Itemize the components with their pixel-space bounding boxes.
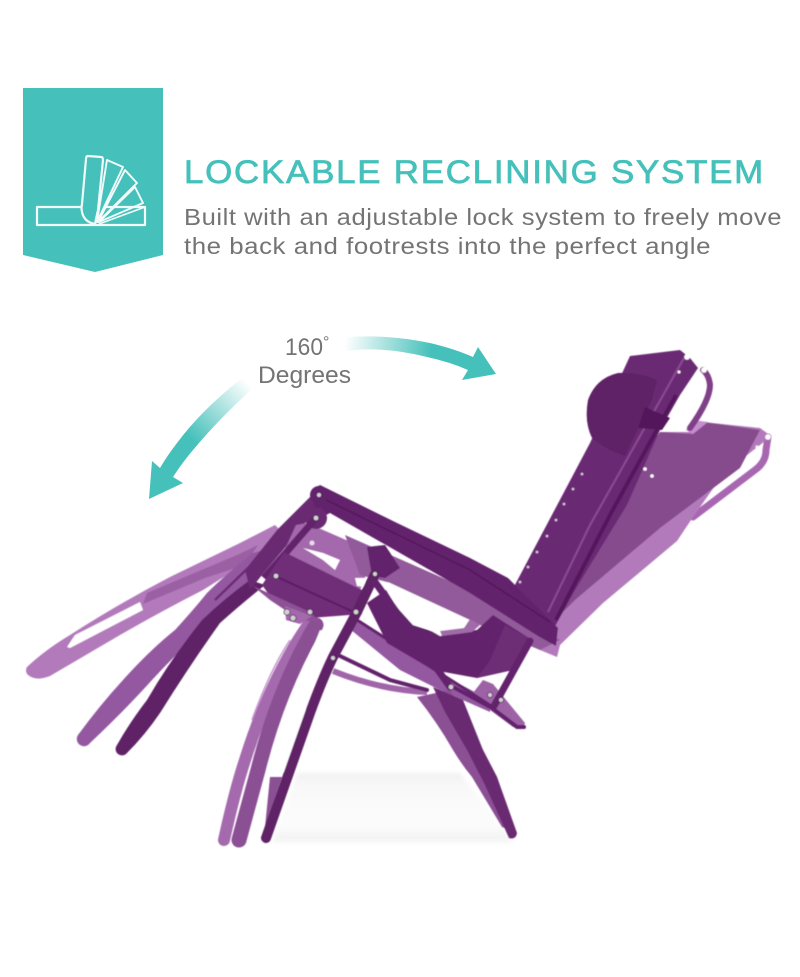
arm rest [312,485,558,646]
banner badge with recline icon [23,88,163,272]
light footrest position [26,525,285,679]
label: 160 degrees: 160 [285,334,323,361]
white pivot points [643,354,771,478]
pivot links to footrest [310,486,328,504]
label: 160 degrees [258,334,351,389]
lower loop and under-seat bands [333,620,525,832]
medium footrest position [77,545,280,746]
headrest pillow [587,373,657,456]
arrow: downward rotation [149,375,252,499]
title: LOCKABLE RECLINING SYSTEM [184,154,765,190]
dark back rest with headrest [508,350,710,632]
light and medium front legs [224,625,324,840]
chair: reclining chair in three overlaid positions [26,350,771,840]
description text: the back and footrests into the perfect angle [184,233,711,259]
description text: Built with an adjustable lock system to freely move [184,204,782,230]
light back rest position [540,420,771,657]
back rest holes [510,473,583,598]
description text [184,204,782,259]
label: 160 degrees: Degrees [258,362,351,389]
lower panel [262,552,362,618]
label: 160 degrees: ° [323,334,329,351]
dark front leg and rear leg [266,574,530,838]
ground shadow [272,773,515,843]
bracket [285,606,312,624]
seat and arm frame [253,485,560,678]
arrow: upward rotation [340,336,496,380]
dark footrest position [116,497,320,755]
icon: reclining fan [37,156,145,225]
bolts [273,492,504,702]
